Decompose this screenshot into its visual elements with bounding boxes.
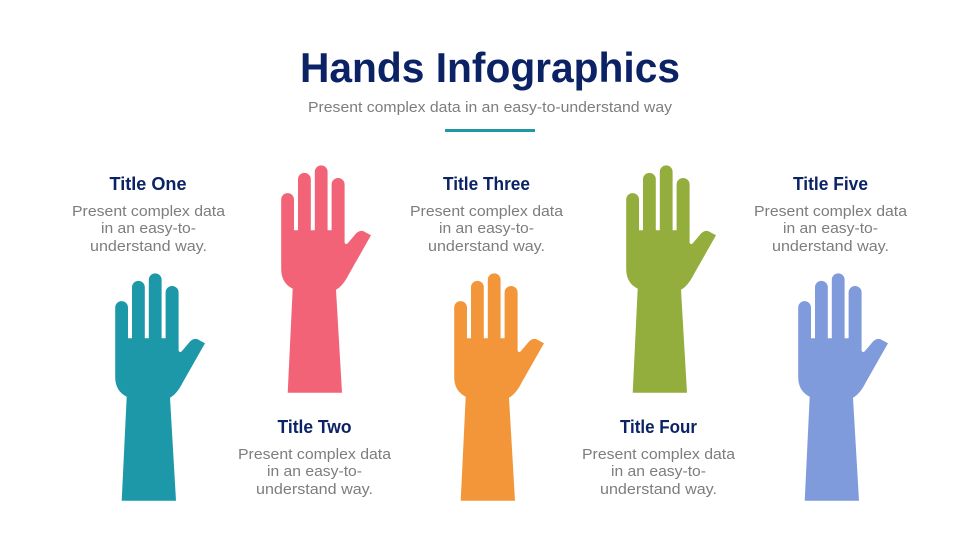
panel: title two xyxy=(238,417,392,498)
title underline xyxy=(445,129,535,132)
text block: title three: Present complex data xyxy=(410,203,564,220)
text block: title one xyxy=(72,203,226,255)
panel: title five xyxy=(754,174,908,255)
text block: title four xyxy=(582,446,736,498)
text block: title five: Present complex data xyxy=(754,203,908,220)
text block: title two: understand way. xyxy=(256,481,373,498)
text block: title two xyxy=(238,446,392,498)
icon: orange hand xyxy=(454,273,544,501)
text block: title five xyxy=(754,203,908,255)
heading: title four: Title Four xyxy=(620,417,697,437)
panel: title four xyxy=(582,417,736,498)
text block: title five: understand way. xyxy=(772,238,889,255)
text block: title two: in an easy-to- xyxy=(267,463,362,480)
heading: title one: Title One xyxy=(110,174,186,194)
text block: title two: Present complex data xyxy=(238,446,392,463)
text block: title three: understand way. xyxy=(428,238,545,255)
text block: title four: Present complex data xyxy=(582,446,736,463)
icon: green hand xyxy=(626,165,716,393)
heading: title two: Title Two xyxy=(278,417,352,437)
heading: title three: Title Three xyxy=(443,174,530,194)
heading: title five: Title Five xyxy=(793,174,868,194)
title: Hands Infographics xyxy=(300,44,680,91)
text block: title four: understand way. xyxy=(600,481,717,498)
text block: title three xyxy=(410,203,564,255)
icon: red hand xyxy=(281,165,371,393)
text block: title one: understand way. xyxy=(90,238,207,255)
panel: title three xyxy=(410,174,564,255)
text block: title one: in an easy-to- xyxy=(101,220,196,237)
icon: blue hand xyxy=(798,273,888,501)
text block: title four: in an easy-to- xyxy=(611,463,706,480)
icon: teal hand xyxy=(115,273,205,501)
text block: title three: in an easy-to- xyxy=(439,220,534,237)
text block: title five: in an easy-to- xyxy=(783,220,878,237)
panel: title one xyxy=(72,174,226,255)
text block: title one: Present complex data xyxy=(72,203,226,220)
subtitle: Present complex data in an easy-to-understand way xyxy=(308,99,673,116)
